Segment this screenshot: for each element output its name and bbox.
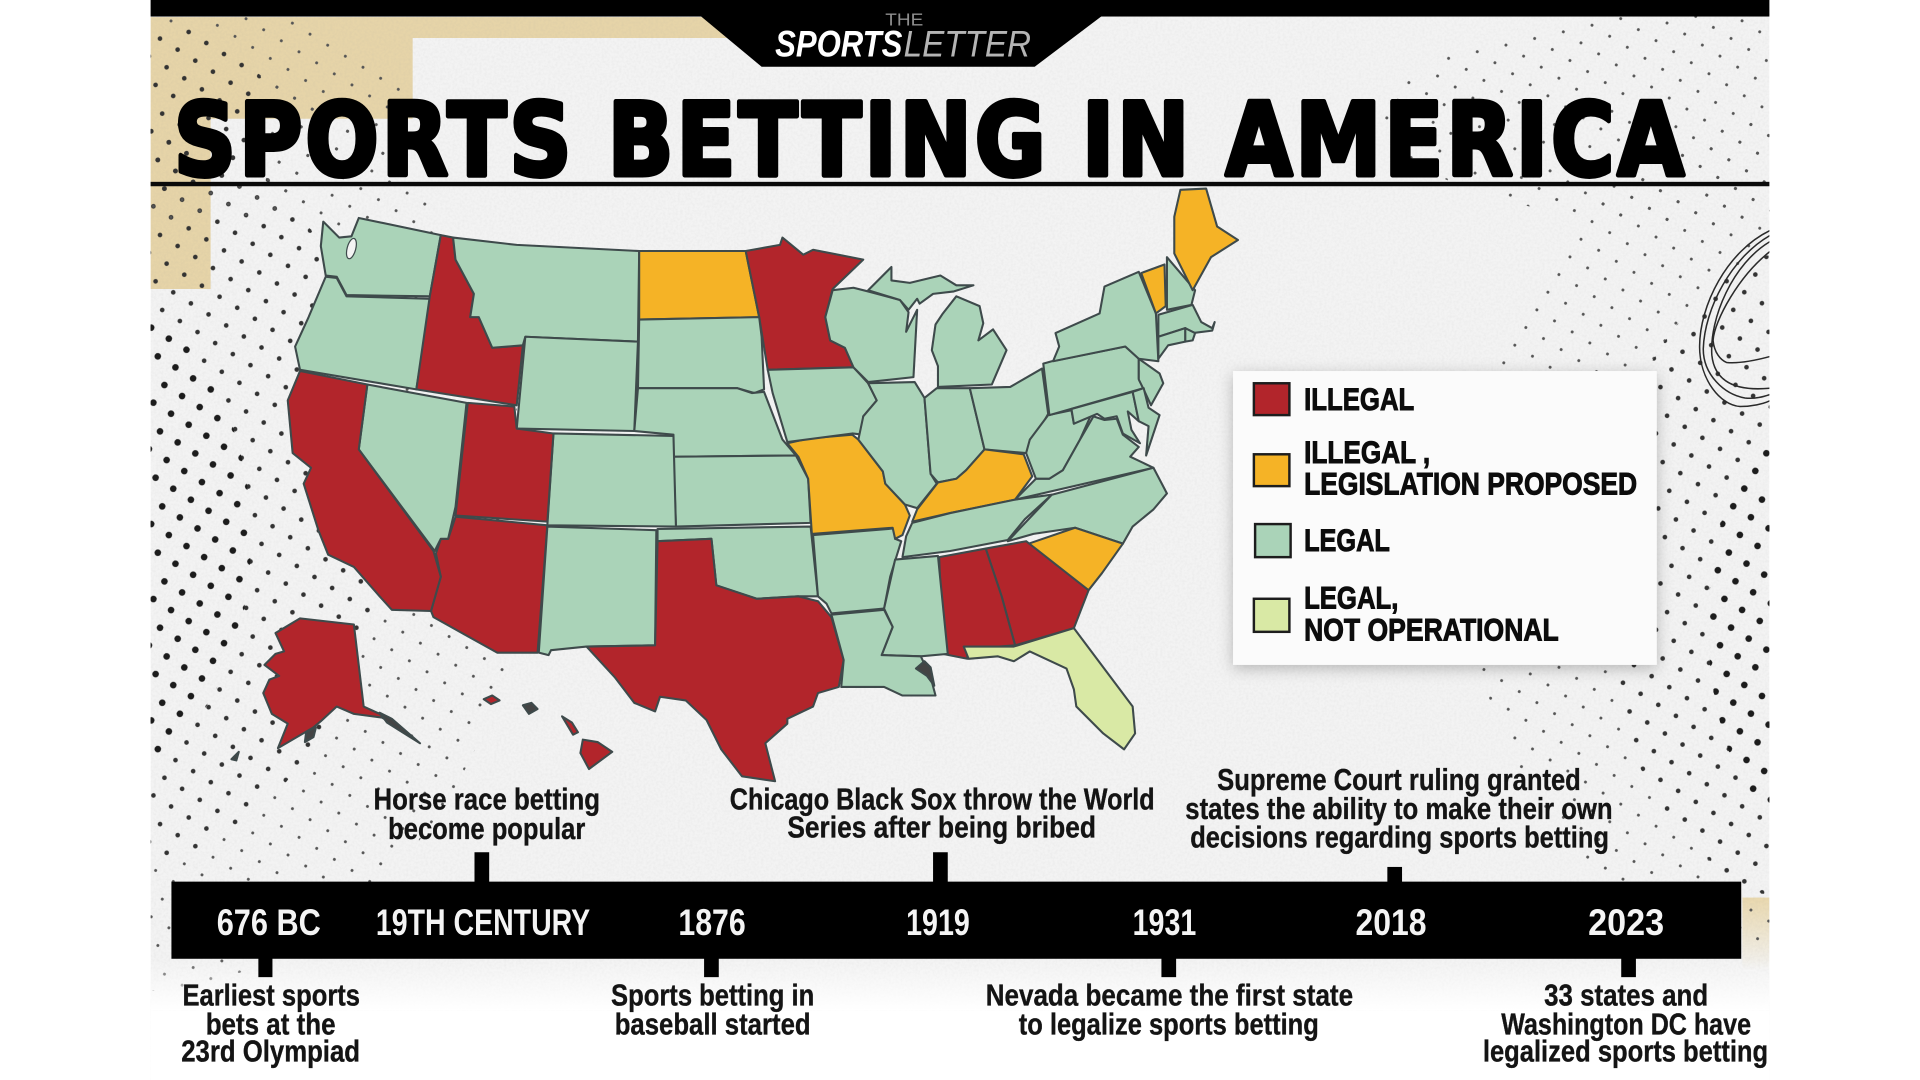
caption: 676 BC: Earliest sports xyxy=(182,978,360,1012)
caption: 19th century xyxy=(373,782,600,846)
state: Alaska xyxy=(263,618,394,748)
state: New Jersey xyxy=(1139,359,1163,405)
timeline years xyxy=(217,902,1664,943)
water: Puget Sound xyxy=(345,237,358,260)
state: Georgia xyxy=(986,541,1089,645)
caption: 1931: Nevada became the first state xyxy=(986,978,1353,1012)
legend item: legal: LEGAL xyxy=(1304,522,1390,558)
timeline years: 676 BC xyxy=(217,902,321,943)
logo: The Sportsletter xyxy=(775,10,1031,64)
state: Tennessee xyxy=(902,495,1052,557)
state: Oregon xyxy=(295,277,431,389)
legend item: legal, not operational xyxy=(1254,580,1559,647)
legend item: illegal: ILLEGAL xyxy=(1304,381,1414,417)
map of US states by betting legality xyxy=(231,189,1238,781)
caption: 1876: Sports betting in xyxy=(611,978,814,1012)
legend panel xyxy=(1233,371,1657,665)
timeline xyxy=(171,763,1768,1069)
legend item: illegal, legislation proposed: LEGISLATION PROPOSED xyxy=(1304,466,1637,502)
state: Michigan Upper Peninsula xyxy=(868,267,973,310)
caption: 2018: Supreme Court ruling granted xyxy=(1217,763,1581,797)
state: Kentucky xyxy=(912,449,1032,522)
caption: 676 BC xyxy=(181,978,360,1069)
Mississippi delta xyxy=(916,661,934,686)
state: Massachusetts xyxy=(1158,305,1215,337)
caption: 2023: legalized sports betting xyxy=(1483,1035,1768,1069)
state: West Virginia xyxy=(1026,410,1091,479)
state: Vermont xyxy=(1141,264,1166,313)
caption: 2023 xyxy=(1483,978,1768,1069)
caption: 1919 xyxy=(730,782,1155,845)
state: New Mexico xyxy=(539,527,656,655)
state: Iowa xyxy=(768,367,877,442)
state: Rhode Island xyxy=(1185,328,1195,342)
state: South Carolina xyxy=(1029,528,1123,590)
state: Washington xyxy=(321,218,441,296)
timeline years: 1919 xyxy=(906,902,970,943)
caption: 1931: to legalize sports betting xyxy=(1019,1008,1319,1042)
state: Kansas xyxy=(673,456,811,527)
state: South Dakota xyxy=(638,317,764,393)
state: Virginia xyxy=(1015,416,1153,500)
timeline bar xyxy=(171,882,1741,959)
state: Oklahoma xyxy=(658,527,818,599)
top black bar and logo banner xyxy=(151,0,1769,67)
state: Maine xyxy=(1174,189,1238,290)
state: North Carolina xyxy=(1008,468,1167,544)
caption: 1931 xyxy=(986,978,1353,1042)
legend item: legal xyxy=(1255,522,1390,558)
state: Maryland xyxy=(1071,392,1140,443)
state: Minnesota xyxy=(746,238,863,370)
state: New Hampshire xyxy=(1167,257,1195,310)
caption: 2018: decisions regarding sports betting xyxy=(1190,820,1609,854)
timeline ticks xyxy=(258,852,1636,977)
state: California xyxy=(288,371,441,611)
state: Colorado xyxy=(547,433,676,527)
state: Nebraska xyxy=(634,388,796,457)
legend item: legal, not operational: NOT OPERATIONAL xyxy=(1304,611,1559,647)
state: Missouri xyxy=(787,435,910,539)
state: Pennsylvania xyxy=(1043,347,1144,415)
state: Arkansas xyxy=(813,528,902,613)
caption: 1876 xyxy=(611,978,814,1042)
timeline years: 1931 xyxy=(1133,902,1196,943)
paper background with halftone dots xyxy=(150,14,1770,991)
title: SPORTS BETTING IN AMERICA xyxy=(174,82,1687,199)
logo: The Sportsletter: LETTER xyxy=(904,23,1031,64)
state: Michigan Lower Peninsula xyxy=(932,296,1007,387)
title rule xyxy=(151,182,1769,186)
caption: 1919: Series after being bribed xyxy=(787,811,1096,845)
legend item: illegal xyxy=(1254,381,1414,417)
state: Illinois xyxy=(858,382,937,508)
Alaska islands xyxy=(231,713,420,760)
caption: 2018 xyxy=(1185,763,1613,854)
state: North Dakota xyxy=(639,251,759,320)
caption: 1919: Chicago Black Sox throw the World xyxy=(730,782,1155,816)
caption: 2018: states the ability to make their own xyxy=(1185,792,1613,826)
caption: 2023: 33 states and xyxy=(1544,978,1708,1012)
state: Delaware and eastern shore xyxy=(1133,388,1160,456)
caption: 676 BC: 23rd Olympiad xyxy=(181,1035,360,1069)
state: Texas xyxy=(587,539,844,781)
timeline years: 1876 xyxy=(678,902,746,943)
state: Idaho xyxy=(416,235,523,405)
caption: 676 BC: bets at the xyxy=(206,1008,336,1042)
state: Arizona xyxy=(431,517,547,653)
state: Louisiana xyxy=(831,610,936,696)
state: Mississippi xyxy=(882,556,948,656)
state: Indiana xyxy=(924,388,984,482)
legend item: legal, not operational: LEGAL, xyxy=(1304,580,1398,616)
timeline years: 19TH CENTURY xyxy=(376,902,590,943)
state: Nevada xyxy=(359,384,467,551)
caption: 2023: Washington DC have xyxy=(1501,1008,1751,1042)
logo: The Sportsletter: THE xyxy=(885,10,923,30)
timeline years: 2018 xyxy=(1356,902,1427,943)
legend item: illegal, legislation proposed xyxy=(1254,434,1637,502)
caption: 19th century: become popular xyxy=(388,812,585,846)
legend item: illegal, legislation proposed: ILLEGAL , xyxy=(1304,434,1430,470)
state: New York xyxy=(1053,272,1158,361)
logo: The Sportsletter: SPORTS xyxy=(775,23,903,64)
state: Wisconsin xyxy=(825,288,917,382)
state: Alabama xyxy=(939,549,1015,659)
state: Montana xyxy=(453,238,639,348)
timeline years: 2023 xyxy=(1588,902,1664,943)
caption: 19th century: Horse race betting xyxy=(373,782,600,816)
caption: 1876: baseball started xyxy=(615,1008,811,1042)
state: Connecticut xyxy=(1158,328,1185,359)
sketched football outline xyxy=(1700,230,1771,407)
state: Hawaii islands xyxy=(484,696,612,769)
state: Florida xyxy=(964,628,1135,749)
state: Utah xyxy=(456,403,553,522)
state: Wyoming xyxy=(517,337,638,431)
state: Ohio xyxy=(970,369,1048,453)
